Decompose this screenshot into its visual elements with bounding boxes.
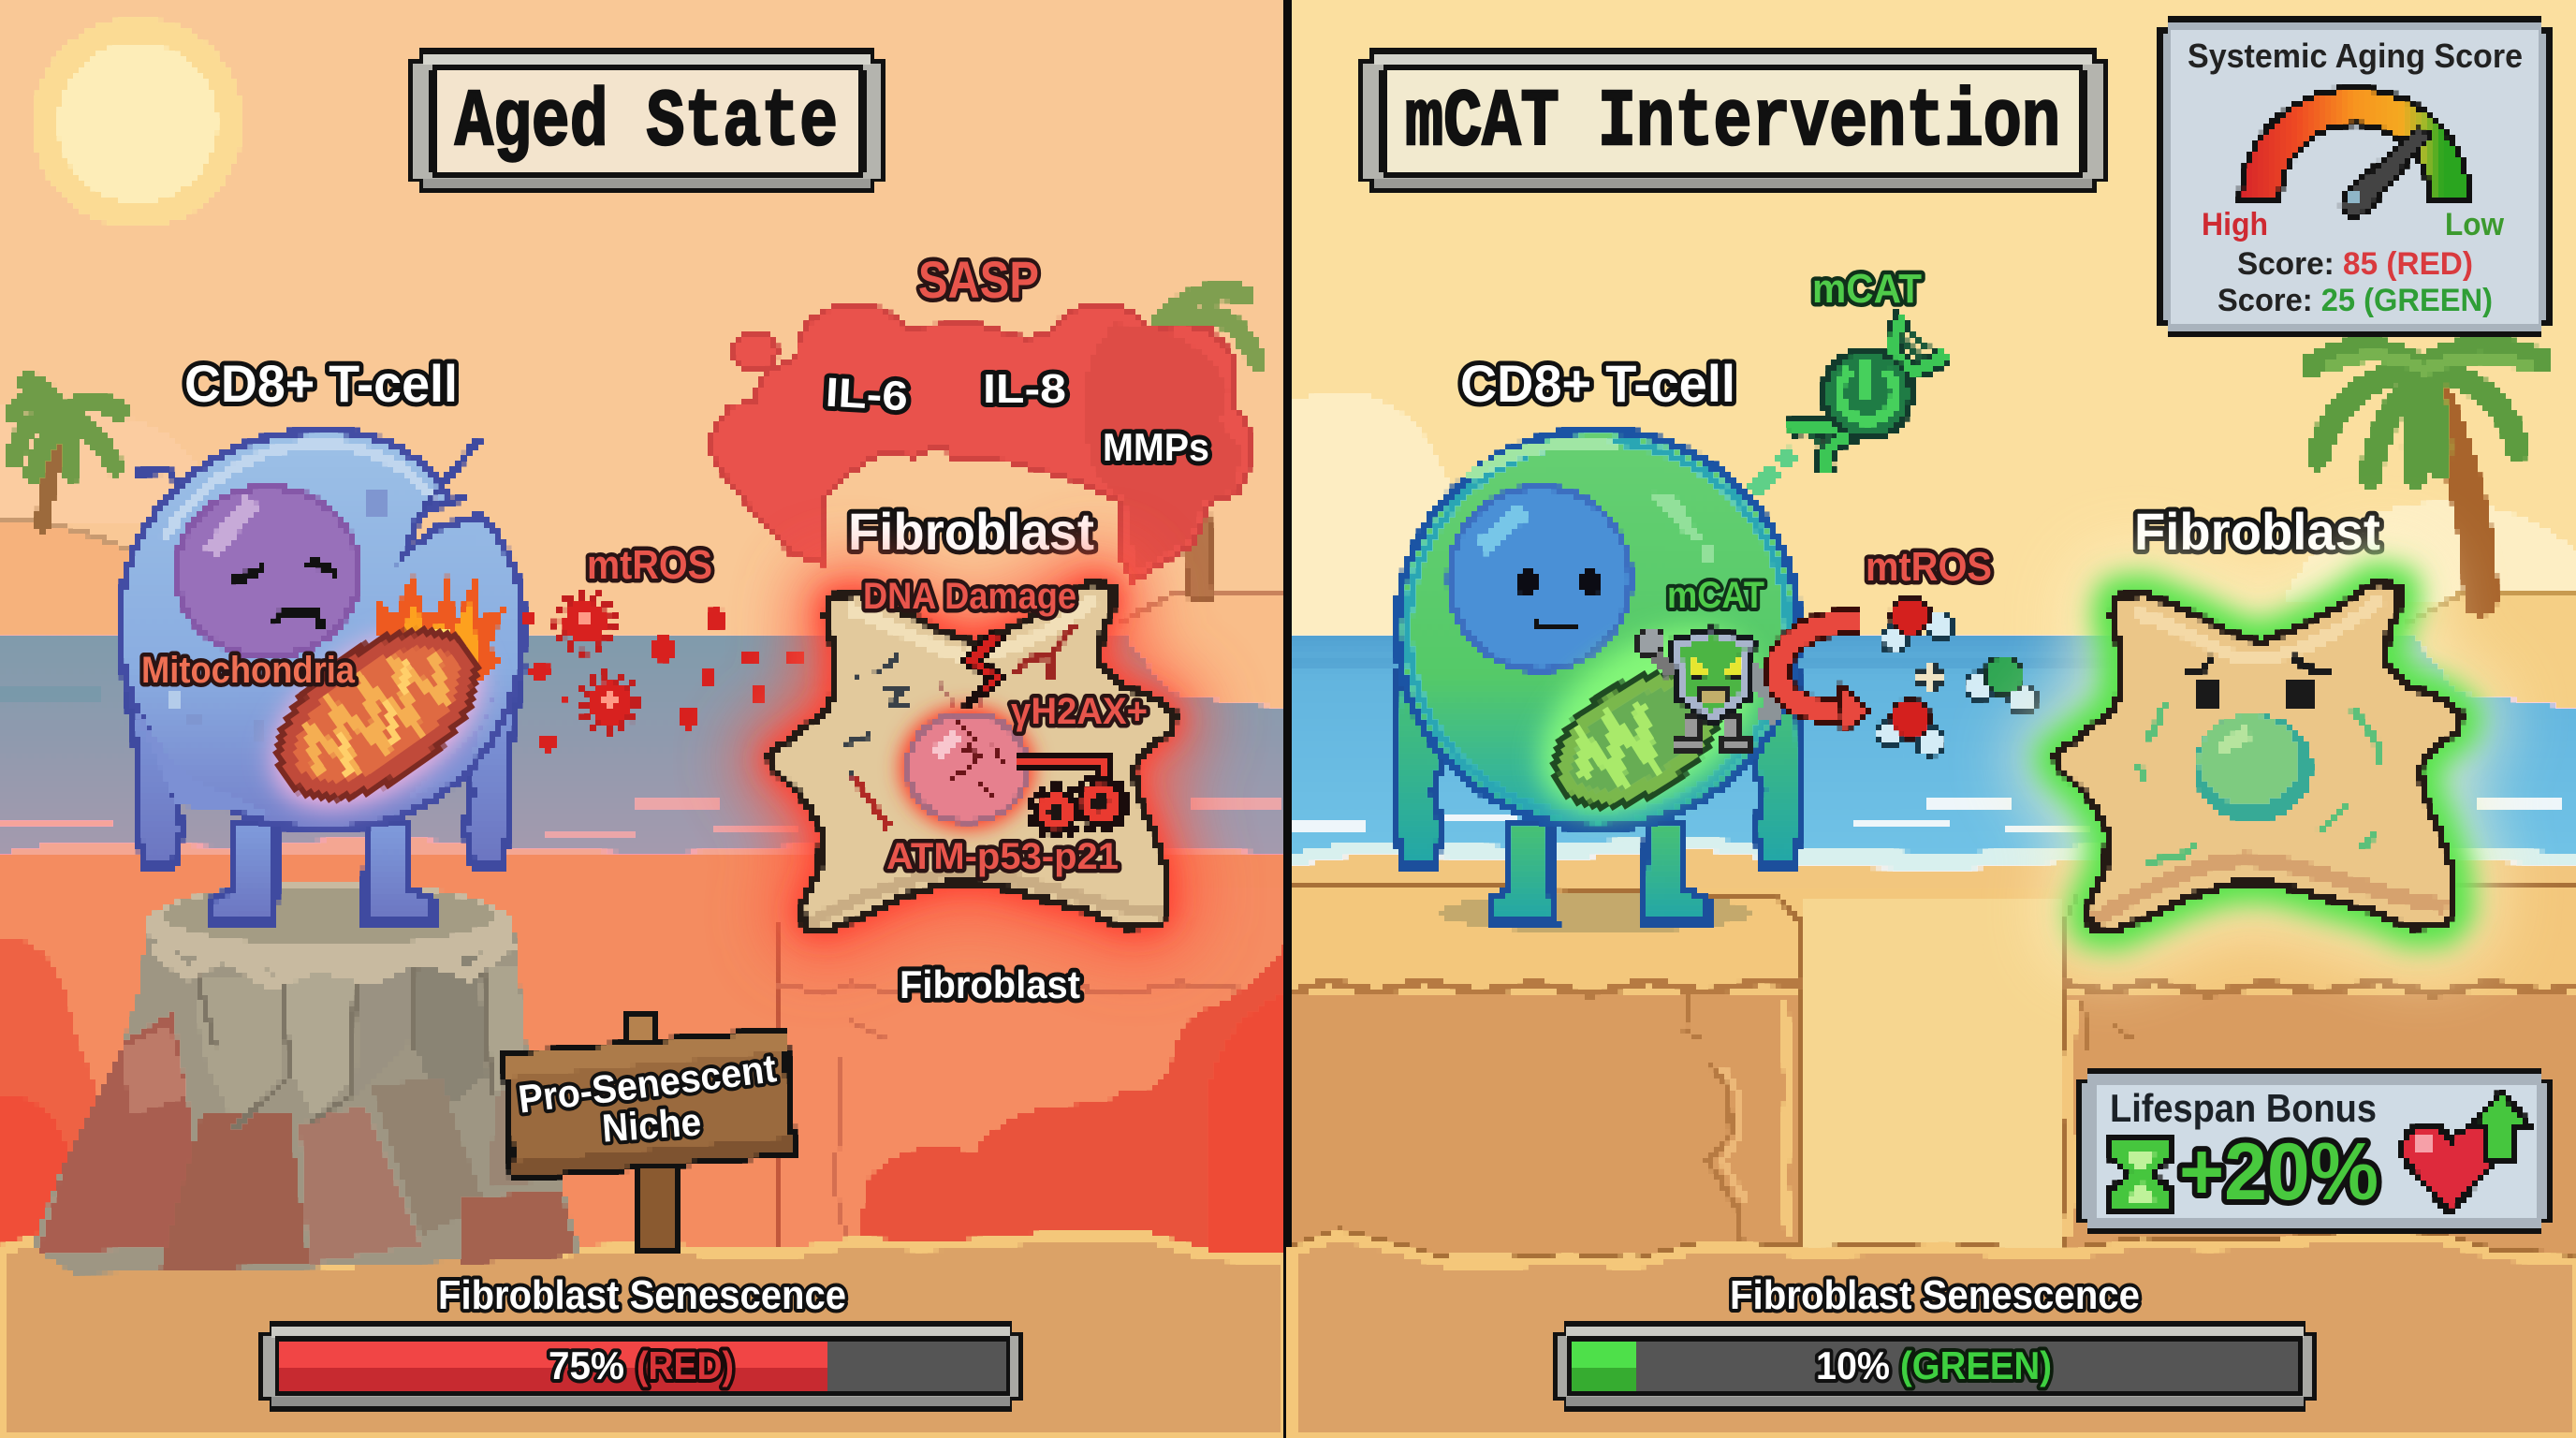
icon: flame on mitochondria [374,573,505,683]
face [2187,657,2329,708]
progress bar: 75% [258,1321,1023,1412]
sign text line 2: Niche [601,1099,703,1151]
fibroblast glow [769,583,1175,930]
title text: Aged State [455,77,838,169]
label: CD8+ T-cell: CD8+ T-cell [1460,354,1735,413]
panel: Systemic Aging Score [2157,16,2553,337]
mitochondria healthy [1533,647,1739,832]
panel title: Lifespan Bonus [2110,1086,2377,1130]
panel title: Systemic Aging Score [2188,37,2523,75]
divider [1283,0,1293,1438]
label: gamma H2AX+: γH2AX+ [1011,691,1148,732]
mitochondria glow [1505,590,1790,852]
label: Fibroblast lower: Fibroblast [900,962,1080,1006]
progress bar: 10% [1553,1321,2317,1412]
fibroblast body [769,583,1175,930]
cell body [1398,431,1798,828]
nucleus green [2194,714,2312,821]
label: mCAT top: mCAT [1812,266,1922,312]
icon: water molecules [1877,597,2036,755]
heading: SASP: SASP [918,250,1039,309]
fibroblast: damaged [769,576,1175,930]
label: Fibroblast Senescence: Fibroblast Senescence [1730,1272,2140,1318]
rock pillar [33,882,580,1273]
label: Fibroblast Senescence: Fibroblast Senescence [438,1272,846,1318]
cloud: SASP [714,307,1249,578]
icon: mCAT gene switch [1752,316,1945,491]
T-cell: healthy cell [1396,431,1801,921]
icon: left palm tree [14,382,120,524]
sign post and board [505,1017,793,1252]
nucleus with calm face [1450,488,1630,669]
title text: mCAT Intervention [1405,77,2060,169]
panel: aged state [0,0,1284,1438]
bar value GREEN: (GREEN) [1900,1343,2052,1387]
signpost: Pro-Senescent Niche [505,1017,793,1252]
label: Mitochondria: Mitochondria [141,650,356,691]
label: Low: Low [2445,207,2505,242]
panel: Lifespan Bonus [2076,1068,2553,1234]
label: mtROS: mtROS [587,542,712,588]
label: High: High [2202,207,2268,242]
icon: signalling gears [1018,760,1126,835]
gauge [2241,89,2469,217]
label: ATM-p53-p21: ATM-p53-p21 [886,836,1119,877]
label: IL-6: IL-6 [825,370,909,419]
arms and legs [125,679,520,921]
score green: Score: 25 (GREEN) [2217,283,2493,318]
label: Fibroblast: Fibroblast [848,502,1094,561]
label: mtROS: mtROS [1866,544,1992,590]
cell body [120,432,523,829]
fibroblast: healthy [2056,583,2461,930]
icon: hourglass [2110,1140,2172,1211]
label: DNA Damage: DNA Damage [863,576,1076,617]
arrow: mtROS conversion [1778,621,1868,733]
icon: heart with up arrow [2403,1093,2532,1212]
bar value 75%: 75% [549,1343,624,1387]
label: CD8+ T-cell: CD8+ T-cell [184,354,458,413]
mitochondria [250,599,505,829]
score red: Score: 85 (RED) [2237,246,2473,282]
fibroblast body [2056,583,2461,930]
T-cell: damaged senescent cell [120,432,523,921]
nucleus glow [900,706,1034,829]
icon: DNA break lightning [962,635,1003,709]
background: aged beach scene [0,0,1284,1438]
panel: mCAT intervention [1293,0,2576,1438]
icon: palm behind SASP cloud [1161,291,1257,599]
value: +20%: +20% [2179,1127,2378,1217]
sign text line 1: Pro-Senescent [516,1046,779,1122]
icon: catalase shield robot [1637,629,1774,751]
fibroblast glow [2056,583,2461,930]
label: Fibroblast: Fibroblast [2134,502,2380,561]
label: mCAT inner: mCAT [1667,575,1764,616]
nucleus with sad face [177,488,359,656]
arms and legs [1396,679,1801,921]
mitochondria glow [242,595,513,843]
background: healthy beach scene [1293,0,2576,1438]
icon: right palm tree [2312,349,2541,599]
stress fibres green [2138,702,2380,861]
nucleus: cracked [908,714,1026,821]
bar value 10%: 10% [1816,1343,1890,1387]
label: MMPs: MMPs [1103,425,1209,469]
title plate: Aged State [408,48,886,193]
bar value RED: (RED) [637,1343,734,1387]
title plate: mCAT Intervention [1358,48,2108,193]
label: IL-8: IL-8 [983,366,1066,412]
icon group: mtROS particles [520,596,803,751]
